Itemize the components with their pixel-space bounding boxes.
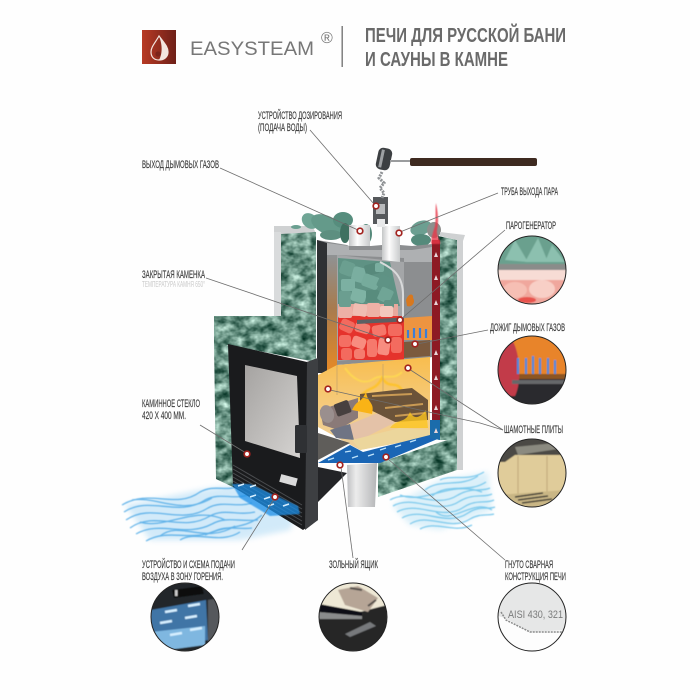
text: ТРУБА ВЫХОДА ПАРА <box>501 186 558 198</box>
photo: afterburn <box>498 336 566 404</box>
firebox walls <box>318 357 430 450</box>
firebox stone block seams <box>337 364 383 405</box>
blue air flow right <box>390 472 495 530</box>
teal stones <box>338 259 394 308</box>
afterburn chamber <box>404 294 432 360</box>
steel grade text: AISI 430, 321 <box>508 609 563 621</box>
header divider <box>342 26 343 67</box>
door <box>228 344 318 530</box>
wooden handle <box>410 158 537 166</box>
cream hearth <box>352 428 430 450</box>
leader lines <box>200 130 505 560</box>
white smoke pipe <box>349 225 370 246</box>
blue air floor <box>318 435 440 463</box>
label: ash box: ЗОЛЬНЫЙ ЯЩИК <box>329 558 378 571</box>
blue channel lower <box>430 420 440 440</box>
label: smoke outlet: ВЫХОД ДЫМОВЫХ ГАЗОВ <box>142 159 219 171</box>
stones top left <box>291 210 372 244</box>
channel arrows <box>434 252 438 433</box>
brand name: EASYSTEAM <box>190 38 314 60</box>
door glass <box>245 365 300 458</box>
photo: ash box <box>319 583 387 651</box>
logo <box>142 30 333 64</box>
label: fireplace glass: 420 Х 400 ММ. <box>142 410 186 422</box>
photo: steam generator <box>498 236 566 304</box>
logs <box>318 388 428 442</box>
photo: chamotte plates <box>498 439 566 507</box>
label: chamotte plates: ШАМОТНЫЕ ПЛИТЫ <box>504 424 563 436</box>
stone chamber <box>337 255 404 361</box>
center pipe <box>382 226 400 262</box>
right steel frame <box>440 232 465 470</box>
stones top right <box>408 218 441 246</box>
inner left wall <box>327 255 337 373</box>
pink backing <box>338 304 398 320</box>
label: fireplace glass: КАМИННОЕ СТЕКЛО <box>142 398 200 410</box>
photo: welded steel <box>498 583 566 651</box>
photo: air supply <box>151 583 219 651</box>
label: steam generator: ПАРОГЕНЕРАТОР <box>506 220 556 232</box>
label: air supply: УСТРОЙСТВО И СХЕМА ПОДАЧИ <box>142 558 235 571</box>
door jamb <box>305 358 318 530</box>
label: closed stone chamber <box>142 269 205 289</box>
water tank cylinder <box>375 147 393 171</box>
open ash drawer <box>318 467 347 502</box>
steam channel flame <box>431 203 440 244</box>
label: dosing device: УСТРОЙСТВО ДОЗИРОВАНИЯ <box>258 109 342 122</box>
title: ПЕЧИ ДЛЯ РУССКОЙ БАНИ <box>365 23 566 47</box>
pink stones <box>338 303 393 318</box>
right marble wall <box>438 236 457 440</box>
chain <box>379 172 384 198</box>
marble side left <box>281 232 316 320</box>
blue air flow left <box>122 484 300 541</box>
stove assembly <box>214 147 537 530</box>
vent grille <box>233 465 302 525</box>
handle rod <box>390 160 411 162</box>
dark left wall <box>317 240 327 373</box>
label: air supply: ВОЗДУХА В ЗОНУ ГОРЕНИЯ. <box>142 571 223 583</box>
steel body <box>317 240 432 373</box>
curved steam generator wall <box>380 262 403 318</box>
teal stones backing <box>338 258 400 308</box>
air arrows <box>238 484 289 506</box>
title <box>365 23 566 71</box>
hot stones glow <box>338 316 404 360</box>
front stone top <box>214 316 316 362</box>
dosing device <box>373 197 388 227</box>
steam bar <box>357 317 412 324</box>
side frame left <box>274 226 316 320</box>
firebox floor plate <box>318 433 350 460</box>
label: closed stone chamber: ТЕМПЕРАТУРА КАМНЯ 650° <box>142 280 205 289</box>
label: dosing device: (ПОДАЧА ВОДЫ) <box>258 122 307 134</box>
label: welded construction: ГНУТО СВАРНАЯ <box>505 559 553 571</box>
title: И САУНЫ В КАМНЕ <box>365 48 508 71</box>
label: closed stone chamber: ЗАКРЫТАЯ КАМЕНКА <box>142 269 205 281</box>
door logo <box>279 474 298 486</box>
bottom right marble <box>378 437 457 497</box>
registered mark: ® <box>321 30 333 47</box>
label: welded construction: КОНСТРУКЦИЯ ПЕЧИ <box>505 571 566 583</box>
hotspot markers <box>244 203 418 500</box>
red steam channel <box>432 240 440 440</box>
air glow on grille <box>232 484 300 516</box>
icon: red square with flame <box>142 30 176 64</box>
ash box <box>347 463 377 507</box>
label: afterburn: ДОЖИГ ДЫМОВЫХ ГАЗОВ <box>490 322 565 334</box>
upper steel lip <box>327 243 432 262</box>
door handle <box>295 425 307 453</box>
red stones <box>338 318 402 360</box>
firebox flames <box>345 368 402 400</box>
front stone left <box>214 342 233 487</box>
